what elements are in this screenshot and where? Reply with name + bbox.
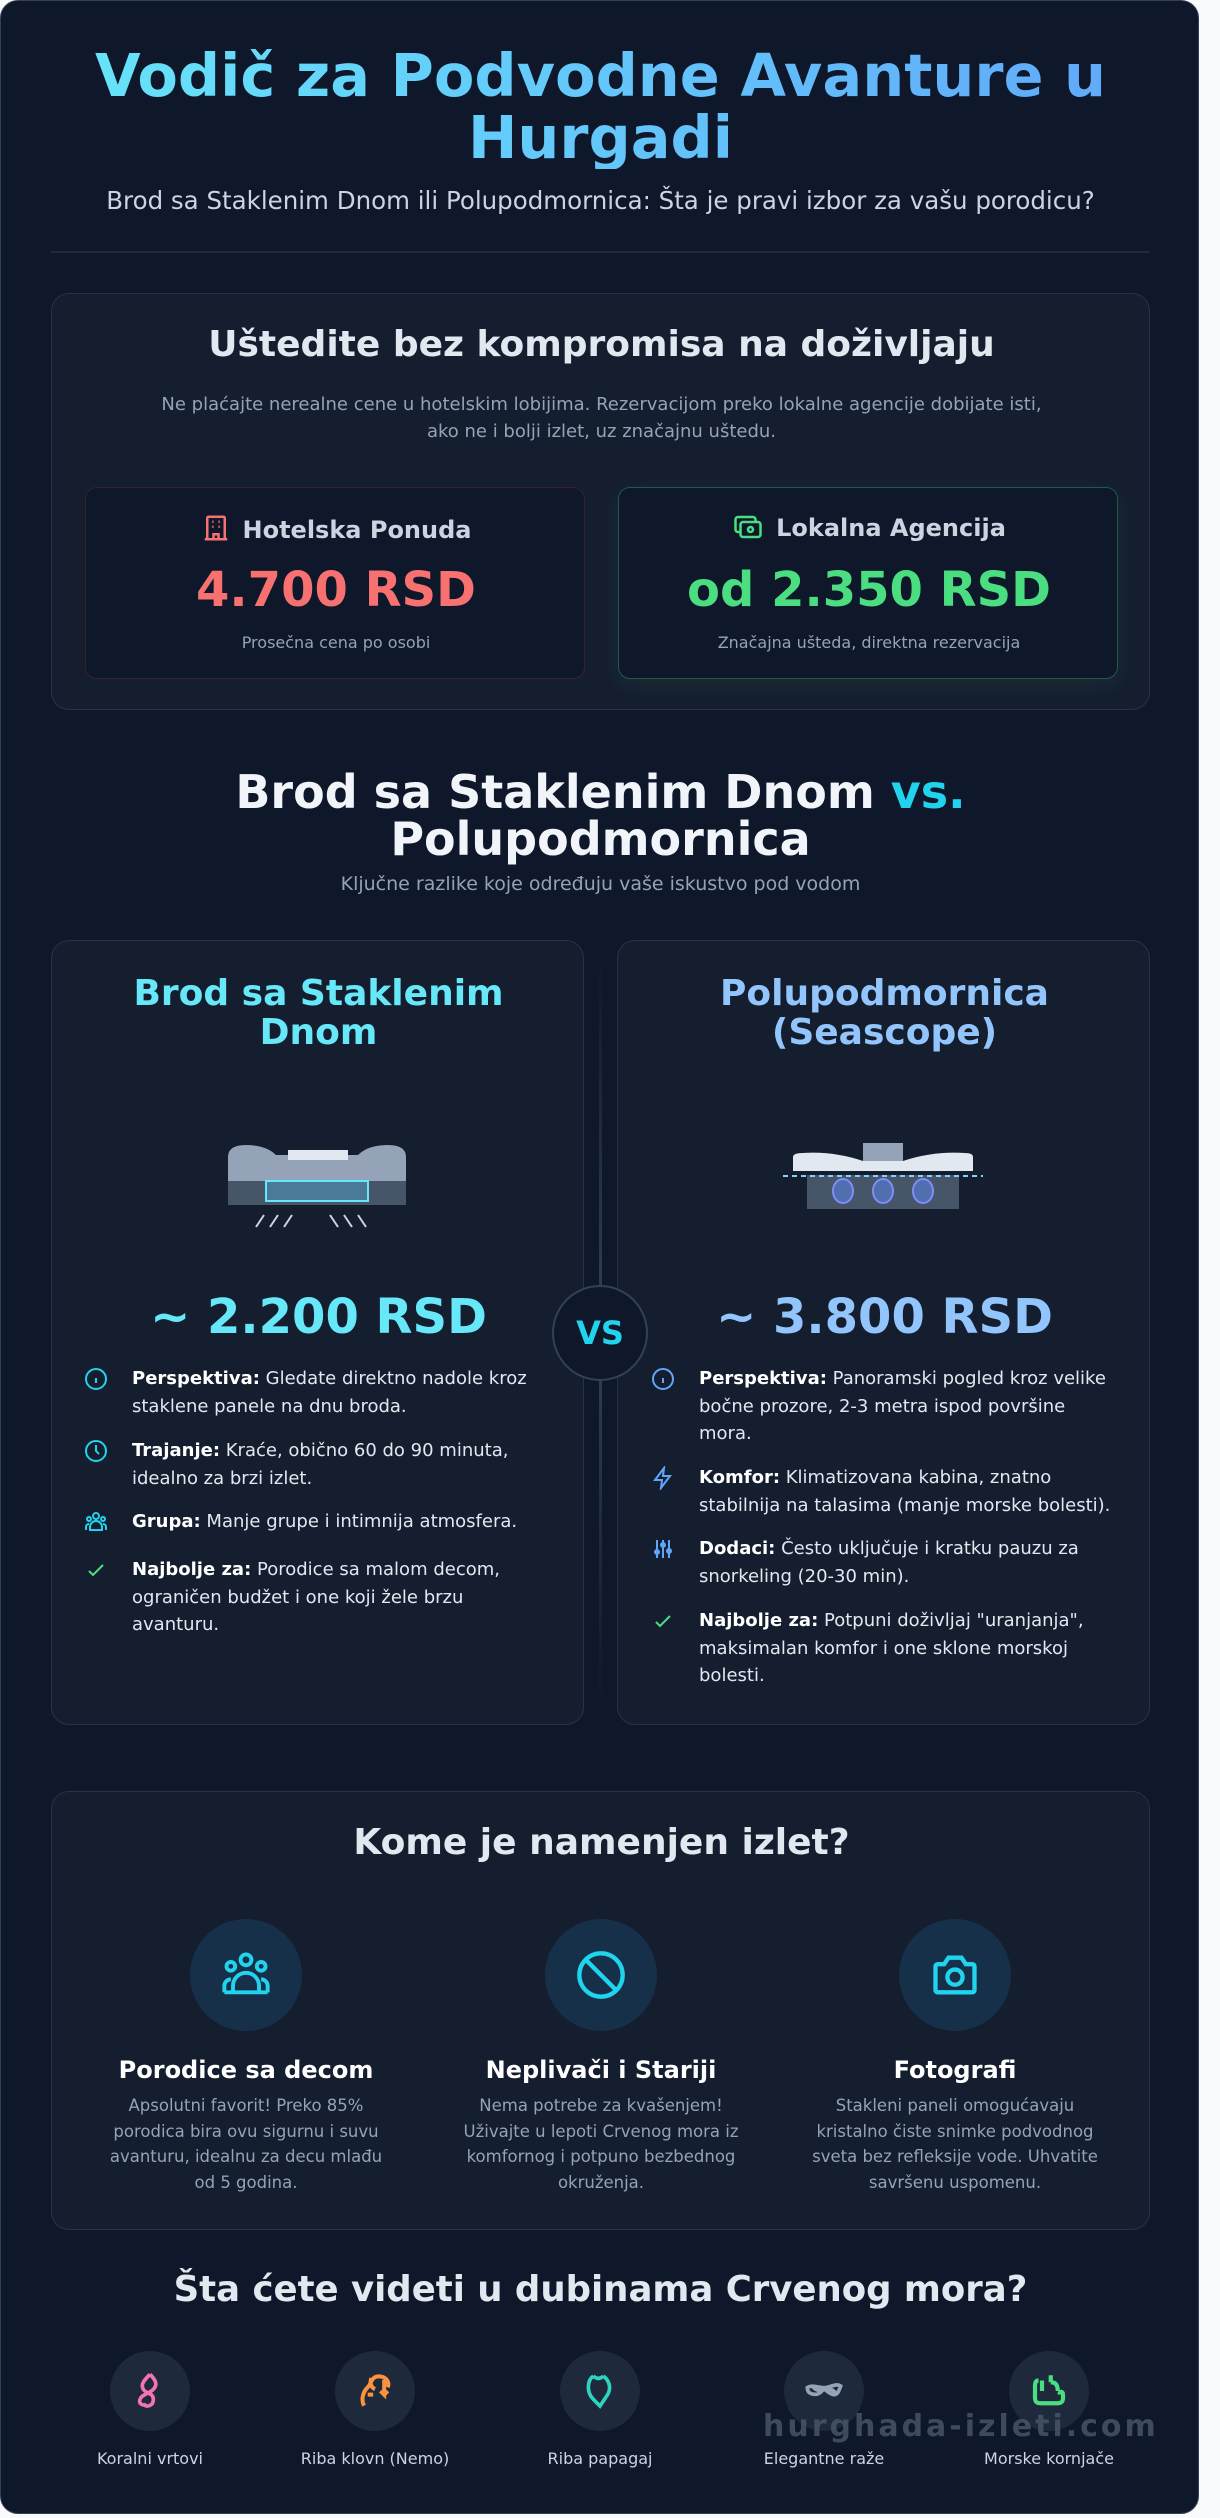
sub title: Polupodmornica — [720, 973, 1049, 1014]
savings text: ako ne i bolji izlet, uz značajnu uštedu. — [427, 421, 776, 442]
card: hotel: Prosečna cena po osobi — [242, 633, 430, 652]
item: perspective: Perspektiva: Gledate direktno nadole kroz staklene panele na dnu broda. — [132, 1368, 527, 1416]
who: non-swimmers: Neplivači i Stariji — [486, 2056, 716, 2084]
title: Hurgadi — [468, 103, 733, 172]
panel: glass boat — [51, 940, 584, 1725]
sub title — [720, 973, 1049, 1053]
sea: clownfish: Riba klovn (Nemo) — [301, 2449, 449, 2468]
comparison subtitle: Ključne razlike koje određuju vaše iskustvo pod vodom — [341, 873, 860, 895]
glass title — [133, 973, 504, 1053]
card: agency: Značajna ušteda, direktna rezervacija — [718, 633, 1020, 652]
sea: coral: Koralni vrtovi — [97, 2449, 203, 2468]
title — [1, 45, 1200, 169]
item: duration: Trajanje: Kraće, obično 60 do 90 minuta, idealno za brzi izlet. — [132, 1440, 508, 1488]
sea: parrotfish: Riba papagaj — [548, 2449, 652, 2468]
item: perspective: Perspektiva: Panoramski pogled kroz velike bočne prozore, 2-3 metra ispod površine mora. — [699, 1368, 1106, 1444]
savings text — [161, 394, 1042, 442]
who: non-swimmers: Nema potrebe za kvašenjem! Uživajte u lepoti Crvenog mora iz komfornog i potpuno bezbednog okruženja. — [464, 2096, 738, 2192]
item: best for: Najbolje za: Potpuni doživljaj "uranjanja", maksimalan komfor i one sklone morskoj bolesti. — [699, 1610, 1084, 1686]
sea: turtles: Morske kornjače — [984, 2449, 1114, 2468]
sub title: (Seascope) — [772, 1012, 997, 1053]
panel: savings — [51, 293, 1150, 710]
comparison heading: Brod sa Staklenim Dnom vs. — [235, 765, 966, 819]
glass title: Brod sa Staklenim — [133, 973, 504, 1014]
watermark: hurghada-izleti.com — [763, 2409, 1159, 2444]
sea heading: Šta ćete videti u dubinama Crvenog mora? — [174, 2269, 1027, 2310]
glass title: Dnom — [260, 1012, 377, 1053]
sea: parrotfish — [548, 2351, 652, 2468]
list: glass features — [85, 1368, 527, 1635]
icon: submarine — [783, 1143, 983, 1209]
vs badge — [552, 1285, 648, 1381]
hotel price: 4.700 RSD — [196, 562, 476, 618]
comparison heading: Polupodmornica — [390, 812, 811, 866]
who heading: Kome je namenjen izlet? — [353, 1822, 850, 1863]
title: Vodič za Podvodne Avanture u — [95, 41, 1106, 110]
agency heading: Lokalna Agencija — [776, 514, 1006, 542]
item: best for: Najbolje za: Porodice sa malom decom, ograničen budžet i one koji žele brzu avanturu. — [132, 1559, 500, 1635]
item: extras: Dodaci: Često uključuje i kratku pauzu za snorkeling (20-30 min). — [699, 1538, 1079, 1586]
who: photographers: Fotografi — [894, 2056, 1016, 2084]
who: photographers — [812, 1919, 1098, 2192]
who: families: Apsolutni favorit! Preko 85% porodica bira ovu sigurnu i suvu avanturu, idealnu za decu mlađu od 5 godina. — [110, 2096, 382, 2192]
glass price: ~ 2.200 RSD — [150, 1289, 487, 1345]
card: agency — [618, 487, 1118, 679]
hotel heading: Hotelska Ponuda — [242, 516, 471, 544]
subtitle: Brod sa Staklenim Dnom ili Polupodmornica: Šta je pravi izbor za vašu porodicu? — [106, 186, 1095, 215]
panel: who — [51, 1791, 1150, 2230]
agency price: od 2.350 RSD — [687, 562, 1051, 618]
item: comfort: Komfor: Klimatizovana kabina, znatno stabilnija na talasima (manje morske bolesti). — [699, 1467, 1110, 1516]
sea: rays: Elegantne raže — [764, 2449, 884, 2468]
savings heading: Uštedite bez kompromisa na doživljaju — [208, 324, 995, 365]
sea: turtles — [984, 2351, 1114, 2468]
sea: coral — [97, 2351, 203, 2468]
who: photographers: Stakleni paneli omogućavaju kristalno čiste snimke podvodnog sveta bez refleksije vode. Uhvatite savršenu uspomenu. — [812, 2096, 1098, 2192]
who: families: Porodice sa decom — [119, 2056, 373, 2084]
panel: submarine — [617, 940, 1150, 1725]
sea: clownfish — [301, 2351, 449, 2468]
vs badge: VS — [576, 1314, 624, 1352]
who: families — [110, 1919, 382, 2192]
item: group: Grupa: Manje grupe i intimnija atmosfera. — [132, 1511, 517, 1532]
sea: rays — [764, 2351, 884, 2468]
who: non-swimmers — [464, 1919, 738, 2192]
sub price: ~ 3.800 RSD — [716, 1289, 1053, 1345]
list: sub features — [652, 1368, 1110, 1686]
savings text: Ne plaćajte nerealne cene u hotelskim lobijima. Rezervacijom preko lokalne agencije dobijate isti, — [161, 394, 1042, 415]
icon: glass boat — [228, 1145, 406, 1228]
card: hotel — [85, 487, 585, 679]
comparison heading — [235, 765, 966, 866]
